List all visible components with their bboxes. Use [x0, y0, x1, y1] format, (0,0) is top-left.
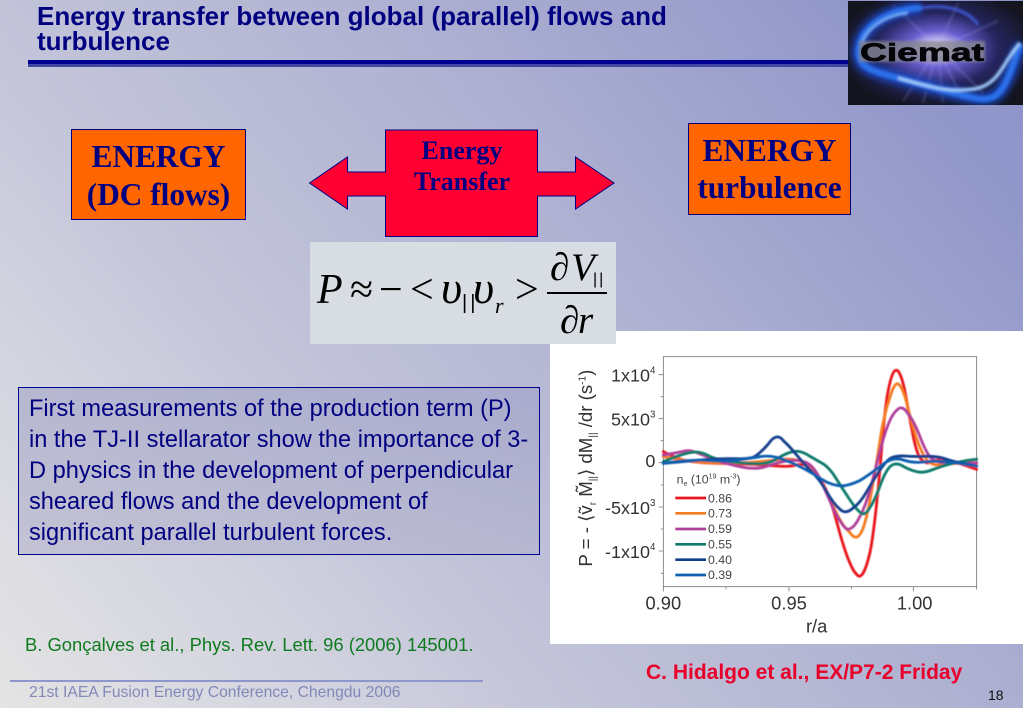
legend: 0.39	[708, 568, 732, 582]
x tick labels: 1.00	[897, 592, 932, 613]
x tick labels	[645, 592, 932, 637]
text block: first measurements	[18, 387, 540, 555]
equation: P	[316, 267, 343, 313]
y tick labels: 4	[650, 365, 656, 376]
text block: first measurements: sheared flows and the development of	[29, 489, 428, 515]
legend: 19	[709, 474, 717, 481]
reference citation: B. Gonçalves et al., Phys. Rev. Lett. 96 (2006) 145001.	[25, 634, 473, 655]
legend: 0.55	[708, 538, 732, 552]
arrow label: Energy	[422, 136, 502, 165]
legend: 0.40	[708, 553, 732, 567]
equation: ||	[462, 292, 478, 314]
x tick labels: 0.95	[771, 592, 807, 613]
y tick labels: 3	[650, 409, 655, 420]
legend: )	[736, 472, 740, 486]
title: turbulence	[37, 26, 170, 56]
box: energy turbulence: ENERGY	[703, 132, 836, 168]
y tick labels: 1x10	[611, 365, 650, 385]
box: energy turbulence	[688, 123, 851, 215]
legend: 0.59	[708, 522, 732, 536]
text block: first measurements: First measurements of the production term (P)	[29, 396, 512, 422]
title	[37, 1, 667, 56]
logo: Ciemat	[848, 1, 1023, 105]
equation: ∂	[560, 299, 579, 342]
text block: first measurements: D physics in the development of perpendicular	[29, 458, 513, 484]
logo wordmark: Ciemat	[860, 39, 985, 67]
legend	[675, 472, 740, 582]
arrow label: Transfer	[414, 167, 510, 196]
y tick labels: 3	[650, 498, 655, 509]
y tick labels: -5x10	[605, 498, 650, 518]
equation: ||	[593, 271, 605, 288]
equation	[310, 242, 616, 344]
legend: e	[684, 481, 688, 488]
box: energy DC flows: (DC flows)	[87, 176, 230, 212]
red citation: C. Hidalgo et al., EX/P7-2 Friday	[646, 661, 962, 684]
equation: r	[495, 293, 504, 318]
equation: V	[571, 246, 599, 289]
equation: ∂	[550, 246, 569, 289]
plot frame and ticks	[659, 357, 977, 591]
y tick labels: 0	[645, 451, 655, 471]
legend: m	[716, 472, 730, 486]
x tick labels: r/a	[806, 616, 828, 637]
equation: r	[578, 299, 594, 342]
chart: production term vs r/a	[550, 331, 1023, 644]
box: energy DC flows: ENERGY	[92, 139, 225, 174]
box: energy DC flows	[71, 129, 246, 220]
y tick labels: -1x10	[605, 542, 650, 562]
equation: −	[379, 267, 403, 313]
y axis title: ||	[588, 432, 599, 438]
legend: 0.86	[708, 492, 732, 506]
equation: υ	[473, 262, 494, 313]
text block: first measurements: significant parallel turbulent forces.	[29, 520, 392, 546]
y axis title: -1	[577, 375, 588, 385]
equation: >	[515, 267, 539, 313]
legend: n	[677, 472, 684, 486]
equation: ≈	[350, 267, 373, 313]
double arrow: energy transfer	[308, 130, 615, 237]
equation: υ	[441, 262, 462, 313]
y axis title: )	[575, 370, 596, 376]
data curves	[663, 370, 977, 576]
equation: <	[410, 267, 434, 313]
y axis title: ⟩ dM	[575, 438, 596, 476]
y tick labels	[605, 365, 656, 562]
text block: first measurements: in the TJ-II stellarator show the importance of 3-	[29, 427, 528, 453]
page number: 18	[988, 687, 1004, 703]
y tick labels: 5x10	[611, 409, 650, 429]
footer text: 21st IAEA Fusion Energy Conference, Chengdu 2006	[29, 684, 401, 701]
y axis title: ||	[588, 476, 599, 481]
legend: -3	[730, 474, 736, 481]
title rule	[28, 60, 850, 64]
y tick labels: 4	[650, 542, 656, 553]
x tick labels: 0.90	[645, 592, 681, 613]
box: energy turbulence: turbulence	[697, 170, 842, 205]
legend: (10	[687, 472, 709, 486]
y axis title: P = - ⟨ṽ	[575, 505, 596, 567]
title: Energy transfer between global (parallel) flows and	[37, 1, 667, 31]
y axis title: M̃	[575, 481, 596, 502]
y axis title: r	[588, 501, 599, 505]
y axis title: /dr (s	[575, 385, 596, 432]
footer rule	[10, 680, 483, 682]
legend: 0.73	[708, 507, 732, 521]
